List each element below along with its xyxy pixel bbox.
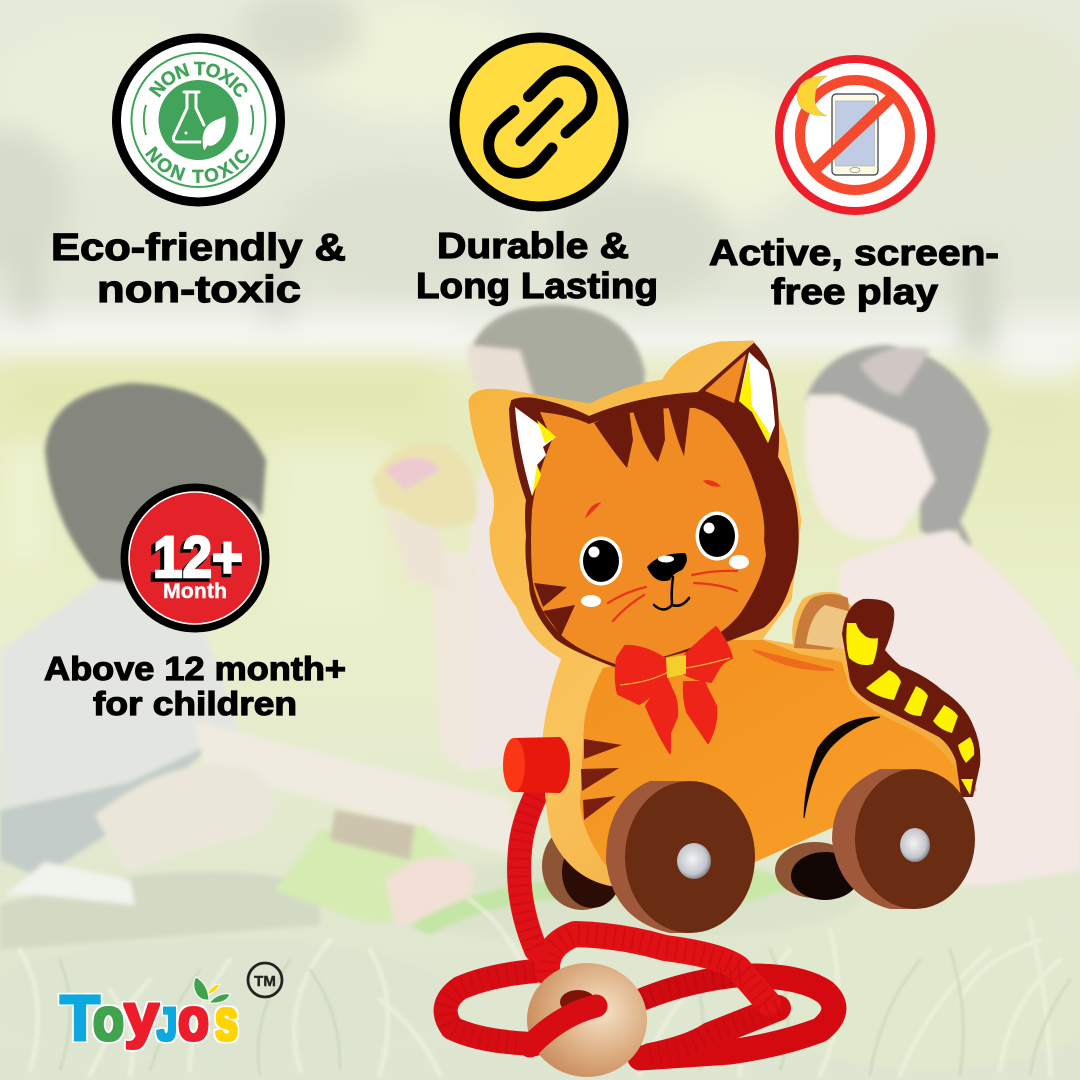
heading: age recommendation: for children [93,685,297,722]
tail bump [794,594,852,650]
icon: phone [832,94,878,175]
right child dress [830,530,1080,885]
heading: eco-friendly: Eco-friendly & [51,227,346,269]
trademark mark [248,963,282,997]
left child shorts [0,742,215,878]
hair bow [860,347,930,395]
icon: 12+ month badge: 12+ [153,525,243,590]
right ear [705,354,746,403]
right eye [696,512,738,560]
heading: eco-friendly [51,227,346,311]
body stripes [581,739,622,820]
logo: Toyjos: o [93,986,124,1053]
logo: Toyjos: s [215,988,238,1053]
body [580,640,960,866]
heading: screen-free play: Active, screen- [709,232,999,273]
icon: flask [174,92,204,142]
icon: crescent moon [797,76,827,116]
red bow [616,627,732,753]
whiskers [608,571,737,621]
right child face [804,395,935,541]
right child hair [805,345,990,545]
left ear [515,407,556,496]
heading: durable: Durable & [437,225,629,266]
wooden bead [527,963,647,1077]
rear wheel [832,769,975,909]
body lines [804,717,880,818]
icon: 12+ month badge [120,484,270,632]
heading: age recommendation [44,650,346,722]
logo: Toyjos: o [178,986,209,1053]
left child hair [45,383,266,585]
nose and mouth [647,553,689,610]
left child arm [195,722,520,858]
toys on ground [275,825,455,925]
heading: screen-free play [709,232,999,312]
icon: non toxic badge: NON TOXIC [145,146,249,184]
far wheels [542,822,859,910]
forehead stripes [594,401,690,468]
rope loops on the ground [446,934,834,1058]
pull-along cat toy [446,342,980,1077]
left child leg [95,765,273,872]
left child shirt [0,580,240,815]
logo: Toyjos [60,977,238,1054]
heading: age recommendation: Above 12 month+ [44,650,346,687]
logo: Toyjos: y [124,982,160,1049]
front wheel [606,781,755,933]
back child [470,305,645,440]
heading: durable: Long Lasting [416,265,658,306]
icon: 12+ month badge: Month [163,580,227,603]
icon: 12+ month badge: 12+ [149,528,242,593]
red peg [503,737,570,793]
icon: chain link badge [454,38,624,206]
cheek stripes [534,583,575,636]
rope from peg [519,797,536,950]
icon: no screen sign [779,59,931,211]
trademark mark: TM [254,973,276,990]
cat tail [842,599,980,797]
icon: leaf [202,115,226,151]
left eye [580,536,622,586]
cat face [531,408,766,664]
logo: Toyjos: J [157,998,177,1050]
back wooden slab [470,342,975,890]
heading: screen-free play: free play [771,271,938,312]
logo: Toyjos: T [60,982,100,1054]
icon: non toxic badge [112,34,285,206]
heading: durable [416,225,658,306]
logo leaves [194,977,209,1000]
cheeks and brows [581,481,749,607]
icon: non toxic badge: NON TOXIC [148,62,248,98]
grass tint patches [0,940,460,1060]
toy in child's hand [372,442,477,528]
cat head outline [510,344,798,668]
heading: eco-friendly: non-toxic [97,269,301,311]
